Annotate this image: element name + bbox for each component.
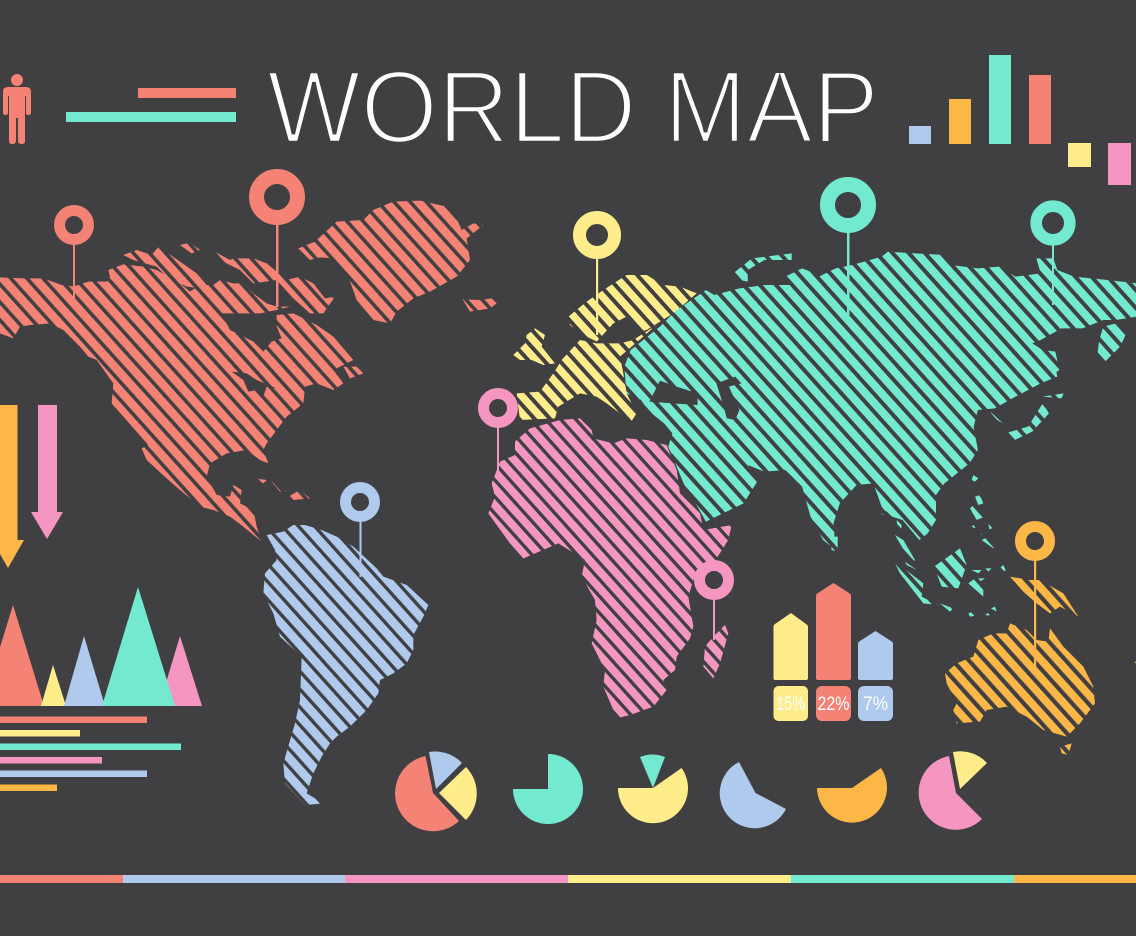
arrow bar: 7%: 7% [863,694,888,715]
arrow: pink down [31,405,63,539]
pin: pink west [484,394,512,471]
pin: blue [346,488,374,577]
map: Africa [488,418,732,718]
bar chart: top right [909,55,1131,185]
arrow bars with percentages [774,583,893,721]
map: North America [0,200,497,542]
pin: orange [1020,526,1050,673]
pin: pink east [700,566,728,640]
arrow bar: 15%: 15% [776,694,805,715]
bottom colour strip [0,875,1136,883]
pie 4 [720,762,786,828]
title: WORLD MAP [267,50,879,164]
arrow: orange down [0,405,24,568]
triangle chart [0,587,202,706]
map: Europe [513,275,697,421]
pin: teal large [828,184,868,315]
pie 1 [395,751,477,831]
pin: yellow [580,218,614,335]
pie 5 [817,768,887,823]
map: South America [263,525,428,805]
horizontal bars [0,716,181,791]
pie 6 [919,751,987,830]
map: Asia [620,240,1136,620]
arrow bar: 22%: 22% [818,694,850,715]
pin: teal right [1036,206,1070,305]
title accent bars [66,88,236,122]
pie 3 [618,755,688,823]
pin: coral large [256,176,298,307]
map: Australia [940,570,1136,760]
icon: person [3,74,31,144]
pie 2 [513,754,583,824]
pin: coral small [60,210,88,302]
